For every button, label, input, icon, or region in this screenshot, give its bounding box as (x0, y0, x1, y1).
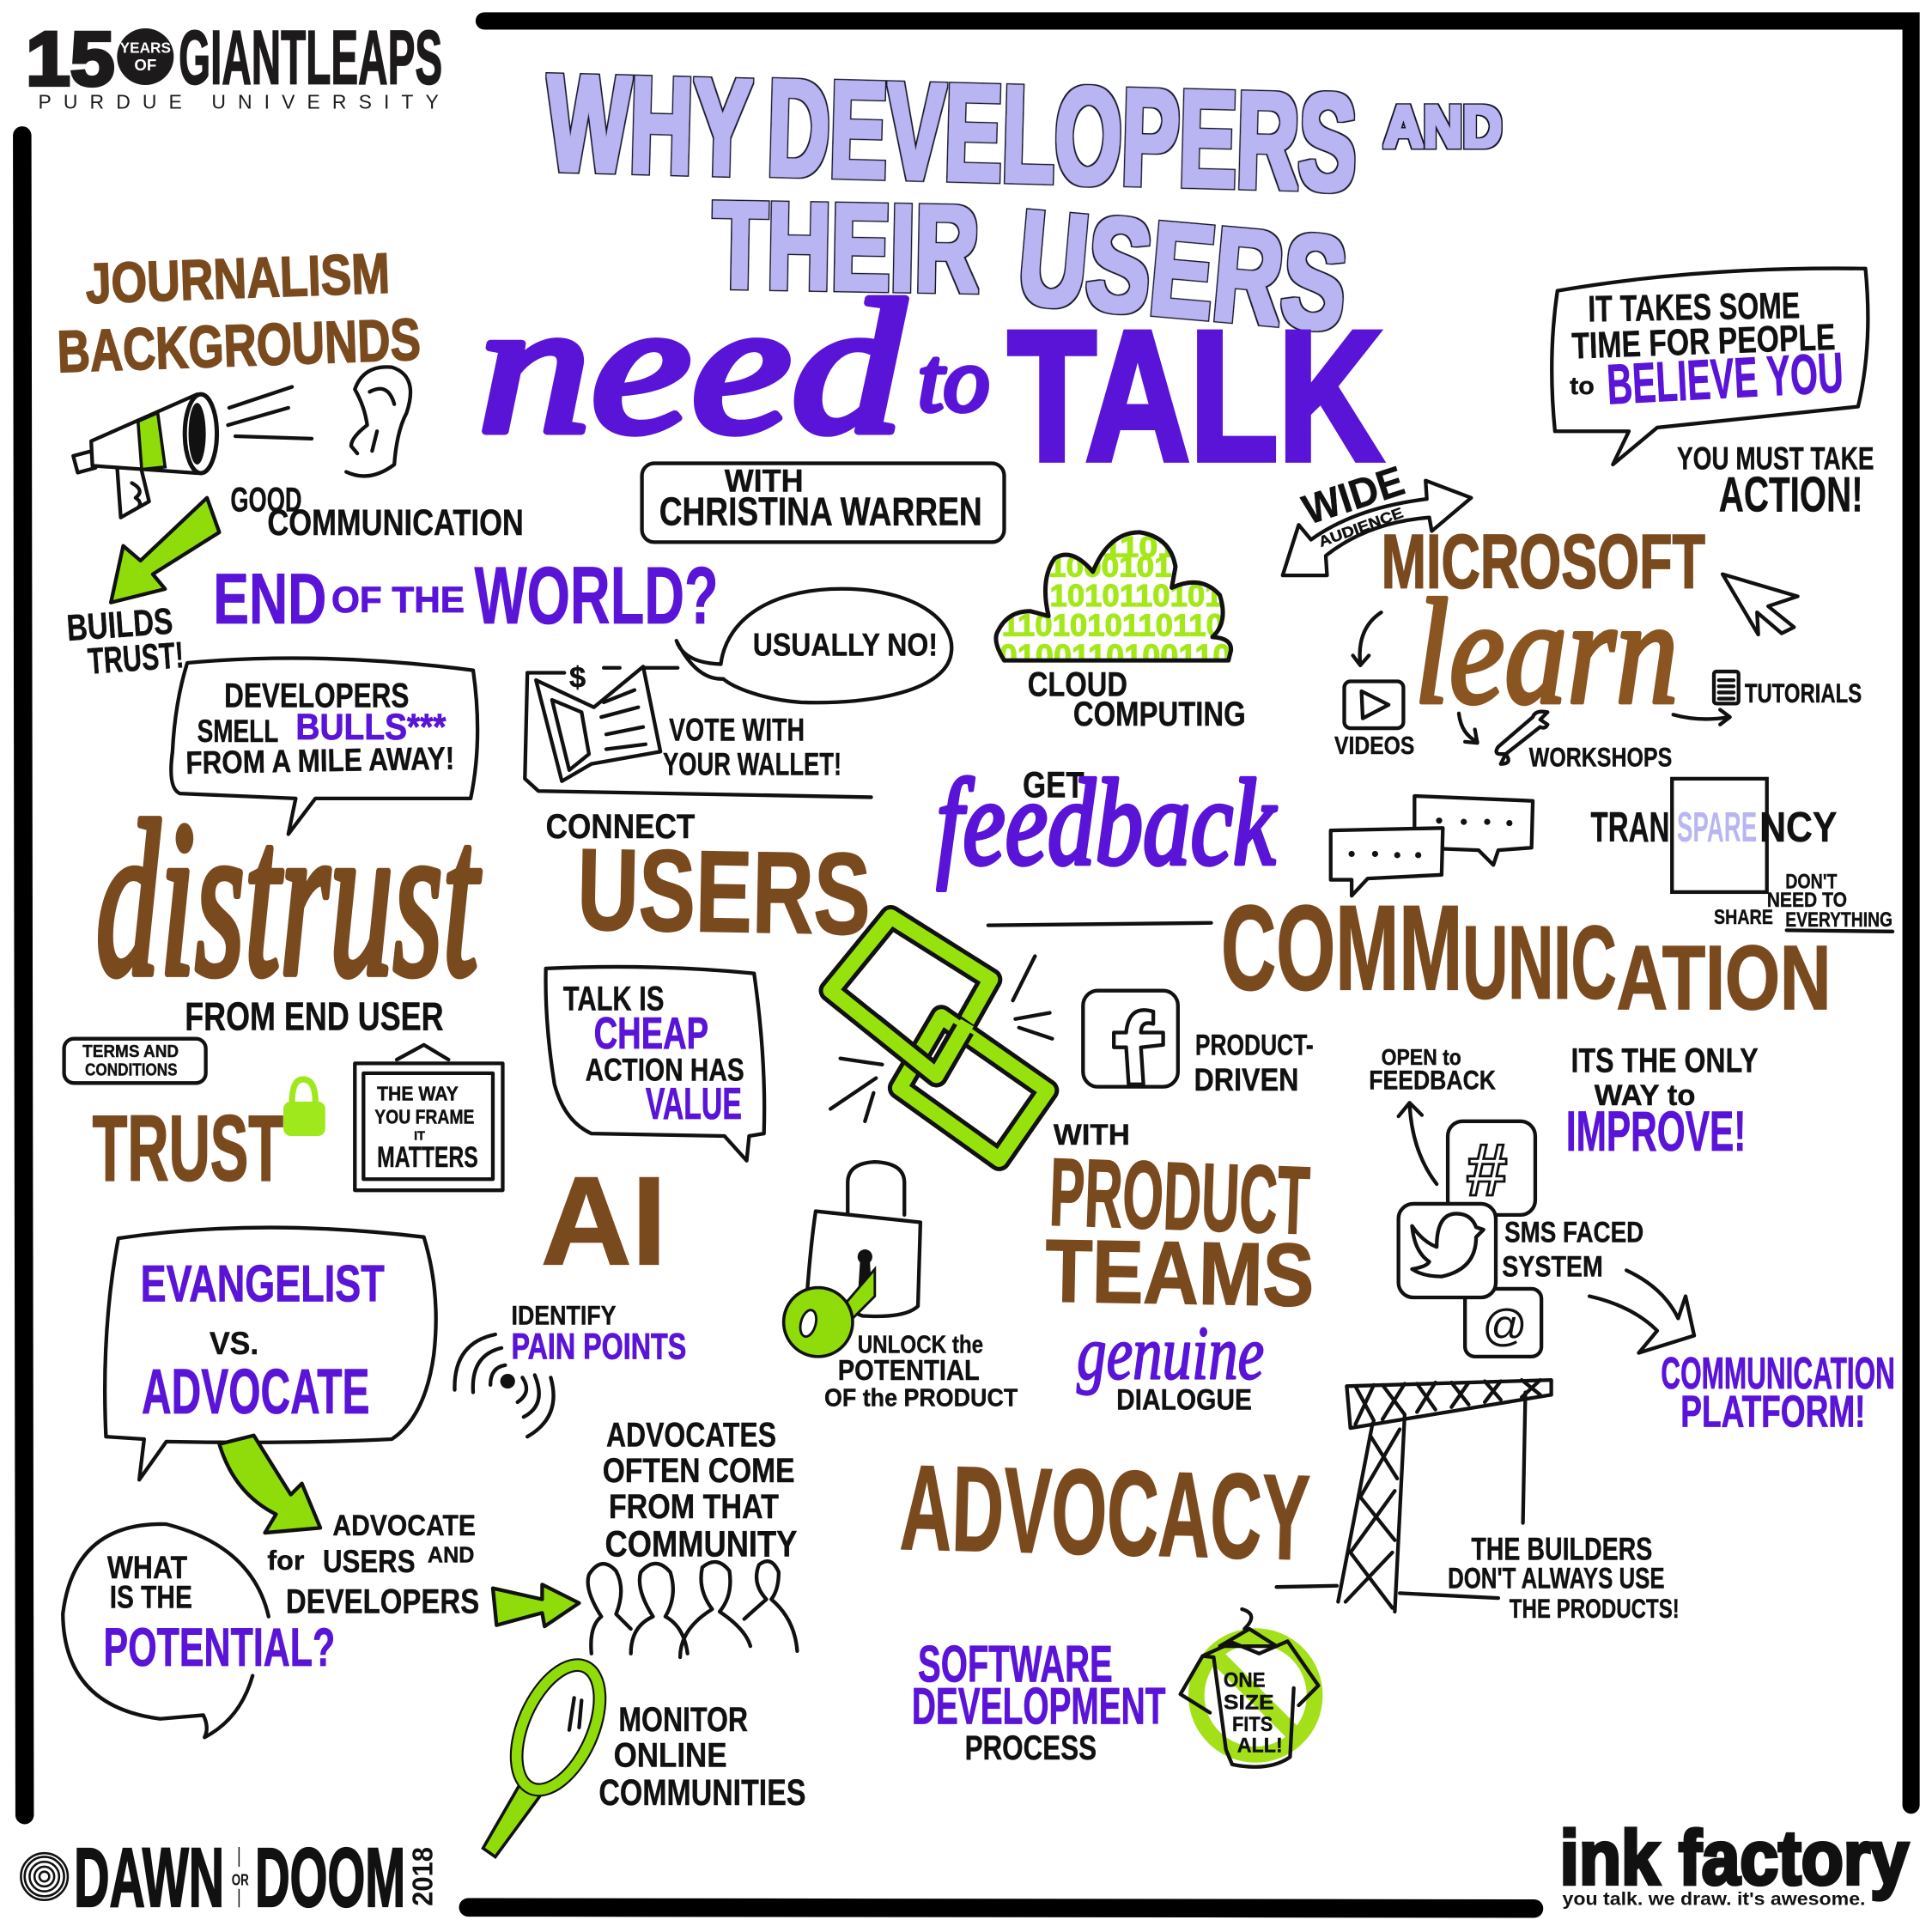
heading: with product teams (1044, 1119, 1315, 1325)
text: advocates often come from that community (603, 1416, 798, 1564)
text: monitor online communities (598, 1700, 805, 1814)
title: AND (1383, 94, 1502, 160)
icon: megaphone (73, 387, 312, 518)
text: communication platform: PLATFORM! (1680, 1387, 1866, 1437)
speech bubble: evangelist vs advocate: ADVOCATE (142, 1355, 369, 1427)
speech bubble: talk is cheap: CHEAP (594, 1008, 708, 1058)
box: terms and conditions: TERMS AND (82, 1042, 179, 1061)
text: unlock the potential: POTENTIAL (838, 1354, 980, 1386)
script: distrust (96, 776, 483, 1039)
double arrow: wide audience (1283, 458, 1471, 575)
icon: wallet and dollar (525, 662, 872, 797)
text: sms faced system with arrow (1502, 1216, 1694, 1353)
speech bubble: evangelist vs advocate: VS. (210, 1325, 258, 1361)
text: advocate for users and developers (267, 1510, 479, 1620)
speech bubble: usually no: USUALLY NO! (753, 626, 938, 662)
script: genuine dialogue: genuine (1077, 1312, 1264, 1396)
item: tutorials: TUTORIALS (1745, 677, 1862, 708)
icon: ear (346, 367, 410, 476)
title: to (918, 329, 989, 430)
speaker box: with Christina Warren: WITH (725, 463, 804, 499)
heading: communication: COMM (1221, 880, 1462, 1015)
title: TALK (1008, 292, 1382, 499)
text: advocates often come from that community: FROM THAT (609, 1487, 779, 1526)
text: software development process: PROCESS (965, 1728, 1097, 1767)
text: identify pain points: IDENTIFY (512, 1300, 616, 1331)
script: genuine dialogue: DIALOGUE (1116, 1384, 1252, 1417)
text: builds trust: BUILDS (65, 601, 174, 649)
text: builds trust (65, 601, 185, 683)
framed sign: the way you frame it matters: IT (414, 1129, 425, 1143)
text: unlock the potential: UNLOCK the (858, 1332, 983, 1359)
script: distrust: FROM END USER (185, 994, 444, 1039)
speech bubble: it takes some time: to (1570, 373, 1595, 400)
logo: dawn or doom 2018: 2018 (407, 1847, 439, 1906)
heading: with product teams: TEAMS (1044, 1220, 1315, 1325)
speech bubble: talk is cheap: ACTION HAS (586, 1051, 744, 1087)
framed sign: the way you frame it matters (355, 1045, 502, 1190)
text: advocates often come from that community: ADVOCATES (606, 1416, 776, 1455)
speech bubble: it takes some time: TIME FOR PEOPLE (1571, 317, 1836, 368)
heading: communication: ATION (1617, 927, 1831, 1029)
logo: 150 years of giant leaps, Purdue University (26, 15, 442, 112)
icon: cloud computing: CLOUD (1028, 665, 1127, 704)
text: builds trust: TRUST! (87, 635, 185, 683)
arrow: green, to community (493, 1584, 579, 1626)
icon: facebook tile, product-driven (1083, 991, 1314, 1097)
framed sign: the way you frame it matters: THE WAY (377, 1082, 459, 1104)
icon: group of people (588, 1561, 797, 1657)
arrow: green, advocate down (219, 1436, 320, 1533)
heading: communication: UNIC (1462, 904, 1617, 1020)
icon: shirt on hanger, one size fits all crossed out (1181, 1609, 1318, 1767)
logo: 150 years of giant leaps, Purdue University: GIANTLEAPS (179, 15, 442, 100)
double arrow: wide audience: AUDIENCE (1316, 504, 1406, 550)
text: advocate for users and developers: USERS (323, 1543, 416, 1579)
script: get feedback: GET (1023, 764, 1084, 805)
heading: journalism backgrounds: JOURNALISM (84, 241, 391, 315)
speech bubble: developers smell: SMELL (197, 713, 278, 749)
icon: magnifying glass (483, 1653, 617, 1856)
text: open to feedback: OPEN to (1382, 1046, 1461, 1070)
heading: advocacy: ADVOCACY (899, 1440, 1311, 1585)
text: advocate for users and developers: for (267, 1545, 304, 1576)
arrow: green, communication to trust (111, 498, 219, 603)
speaker box: with Christina Warren (642, 463, 1004, 542)
speech bubble: talk is cheap (546, 967, 764, 1161)
logo: dawn or doom 2018: DAWN (74, 1831, 224, 1924)
speech bubble: developers smell (171, 658, 477, 834)
text: good communication (230, 481, 524, 544)
icon: crane (1277, 1380, 1552, 1612)
text: software development process (912, 1635, 1166, 1767)
text: good communication: GOOD (230, 481, 302, 519)
text: advocates often come from that community: OFTEN COME (603, 1451, 795, 1490)
transparency with sheet: NEED TO (1767, 889, 1847, 912)
text: connect users: USERS (576, 824, 872, 959)
icon: social tiles: @ (1482, 1300, 1528, 1350)
logo: dawn or doom 2018 (21, 1831, 439, 1924)
icon: social tiles (1399, 1121, 1541, 1357)
speaker box: with Christina Warren: CHRISTINA WARREN (659, 489, 982, 533)
text: vote with your wallet: YOUR WALLET! (663, 746, 841, 782)
text: connect users (546, 807, 872, 959)
speech bubble: developers smell: BULLS*** (295, 707, 447, 748)
text: identify pain points (512, 1300, 686, 1368)
item: videos (1334, 612, 1414, 760)
text: communication platform (1661, 1348, 1895, 1437)
title: USERS (1013, 182, 1352, 359)
text: vote with your wallet: VOTE WITH (669, 711, 805, 747)
icon: shirt on hanger, one size fits all crossed out: SIZE (1224, 1691, 1274, 1714)
trust with green lock: TRUST (93, 1097, 283, 1201)
logo: 150 years of giant leaps, Purdue University: PURDUE UNIVERSITY (38, 90, 439, 112)
icon: facebook tile, product-driven: DRIVEN (1194, 1061, 1298, 1097)
icon: cloud computing: 1101010110110 (1002, 608, 1224, 642)
heading: journalism backgrounds (56, 241, 422, 385)
text: monitor online communities: COMMUNITIES (598, 1772, 805, 1814)
script: genuine dialogue (1077, 1312, 1264, 1417)
speech bubble: evangelist vs advocate: EVANGELIST (141, 1254, 385, 1312)
text: open to feedback: FEEDBACK (1369, 1064, 1496, 1095)
item: videos: VIDEOS (1334, 732, 1414, 760)
speech bubble: talk is cheap: VALUE (646, 1078, 742, 1128)
icon: cursor (1722, 574, 1798, 635)
transparency with sheet: NCY (1759, 805, 1838, 851)
icon: chat bubbles (1331, 796, 1533, 896)
text: advocate for users and developers: AND (428, 1544, 474, 1568)
item: tutorials (1674, 671, 1862, 725)
text: the builders (1448, 1531, 1680, 1624)
icon: cloud computing: COMPUTING (1073, 695, 1246, 733)
text: software development process: DEVELOPMENT (912, 1676, 1166, 1735)
speech bubble: it takes some time (1552, 269, 1868, 465)
text: you must take action (1677, 440, 1874, 523)
heading: microsoft learn: learn (1414, 568, 1678, 735)
framed sign: the way you frame it matters: YOU FRAME (374, 1106, 474, 1128)
logo: dawn or doom 2018: DOOM (255, 1831, 405, 1924)
text: its the only way to improve: WAY to (1595, 1079, 1695, 1112)
transparency with sheet: SHARE (1714, 906, 1773, 929)
speech bubble: what is the potential: POTENTIAL? (104, 1618, 335, 1678)
text: identify pain points: PAIN POINTS (512, 1327, 686, 1368)
speech bubble: what is the potential: WHAT (107, 1549, 187, 1585)
title: THEIR (712, 176, 981, 319)
icon: shirt on hanger, one size fits all crossed out: ALL! (1237, 1734, 1283, 1757)
text: connect users: CONNECT (546, 807, 696, 846)
icon: shirt on hanger, one size fits all crossed out: ONE (1224, 1668, 1266, 1692)
icon: shirt on hanger, one size fits all crossed out: FITS (1232, 1713, 1273, 1736)
logo: dawn or doom 2018: OR (232, 1870, 249, 1888)
heading: with product teams: WITH (1054, 1119, 1130, 1151)
speech bubble: developers smell: FROM A MILE AWAY! (185, 740, 455, 781)
transparency with sheet: EVERYTHING (1785, 908, 1893, 932)
heading: end of the world: END (213, 559, 326, 639)
text: you must take action: YOU MUST TAKE (1677, 440, 1874, 477)
text: monitor online communities: MONITOR (618, 1700, 748, 1739)
text: the builders: DON'T ALWAYS USE (1448, 1563, 1665, 1595)
title: DEVELOPERS (766, 52, 1358, 221)
icon: cloud computing: 1101 (1103, 532, 1176, 564)
text: the builders: THE BUILDERS (1471, 1531, 1652, 1567)
logo: ink factory: you talk. we draw. it's awesome. (1563, 1888, 1866, 1909)
text: open to feedback (1369, 1046, 1496, 1184)
text: advocate for users and developers: DEVELOPERS (286, 1582, 479, 1620)
icon: cloud computing: 1000101 (1048, 551, 1172, 584)
speech bubble: developers smell: DEVELOPERS (224, 677, 409, 715)
icon: green chain (830, 917, 1052, 1159)
logo: 150 years of giant leaps, Purdue University: YEARS (120, 39, 171, 57)
text: sms faced system with arrow: SYSTEM (1502, 1251, 1603, 1284)
speech bubble: usually no (677, 589, 951, 702)
text: its the only way to improve: IMPROVE! (1566, 1099, 1746, 1163)
heading: end of the world: WORLD? (474, 550, 719, 641)
transparency with sheet: DON'T (1785, 871, 1838, 894)
script: get feedback: feedback (937, 755, 1277, 891)
box: terms and conditions: CONDITIONS (85, 1061, 178, 1080)
icon: social tiles: # (1467, 1129, 1507, 1212)
icon: wallet and dollar: $ (569, 662, 586, 695)
transparency with sheet: SPARE (1677, 805, 1757, 851)
transparency with sheet (1591, 779, 1893, 932)
title: need (478, 262, 905, 473)
icon: cloud computing (996, 532, 1246, 733)
speech bubble: evangelist vs advocate (105, 1228, 436, 1479)
icon: wireless signal (454, 1334, 554, 1437)
icon: facebook tile, product-driven: PRODUCT- (1195, 1029, 1314, 1061)
item: workshops (1459, 712, 1672, 773)
text: vote with your wallet (663, 711, 841, 782)
title (478, 46, 1502, 499)
speech bubble: what is the potential: IS THE (110, 1579, 192, 1615)
text: advocate for users and developers: ADVOCATE (332, 1510, 476, 1542)
double arrow: wide audience: WIDE (1297, 458, 1410, 534)
heading: end of the world: OF THE (331, 580, 465, 621)
heading: with product teams: PRODUCT (1048, 1138, 1311, 1255)
text: good communication: COMMUNICATION (267, 502, 524, 544)
heading: end of the world (213, 550, 719, 641)
icon: cloud computing: 0100110100110 (999, 639, 1231, 676)
box: terms and conditions (64, 1039, 206, 1083)
script: distrust: distrust (96, 776, 483, 1022)
text: advocates often come from that community: COMMUNITY (605, 1523, 798, 1564)
speech bubble: it takes some time: IT TAKES SOME (1588, 285, 1801, 331)
text: sms faced system with arrow: SMS FACED (1504, 1216, 1643, 1249)
heading: microsoft learn: MICROSOFT (1382, 518, 1705, 604)
logo: 150 years of giant leaps, Purdue University: OF (134, 56, 156, 74)
title: WHY (545, 46, 754, 205)
heading: microsoft learn (1382, 518, 1705, 735)
trust with green lock (93, 1079, 325, 1201)
text: unlock the potential: OF the PRODUCT (824, 1384, 1018, 1412)
heading: AI: AI (541, 1151, 666, 1291)
text: monitor online communities: ONLINE (614, 1736, 727, 1775)
transparency with sheet: TRAN (1591, 805, 1669, 851)
text: software development process: SOFTWARE (918, 1635, 1113, 1693)
text: unlock the potential (824, 1332, 1018, 1412)
framed sign: the way you frame it matters: MATTERS (377, 1141, 478, 1174)
text: you must take action: ACTION! (1719, 468, 1863, 523)
text: its the only way to improve (1566, 1041, 1759, 1163)
heading: communication (988, 880, 1831, 1029)
item: workshops: WORKSHOPS (1529, 742, 1672, 773)
text: the builders: THE PRODUCTS! (1510, 1593, 1680, 1624)
icon: padlock and green key (784, 1162, 920, 1357)
logo: 150 years of giant leaps, Purdue University: 15 (26, 15, 114, 101)
speech bubble: talk is cheap: TALK IS (563, 980, 664, 1018)
speech bubble: what is the potential (63, 1524, 335, 1737)
icon: cloud computing: 1010110101 (1050, 579, 1222, 613)
text: its the only way to improve: ITS THE ONLY (1571, 1041, 1759, 1079)
heading: journalism backgrounds: BACKGROUNDS (56, 307, 422, 385)
